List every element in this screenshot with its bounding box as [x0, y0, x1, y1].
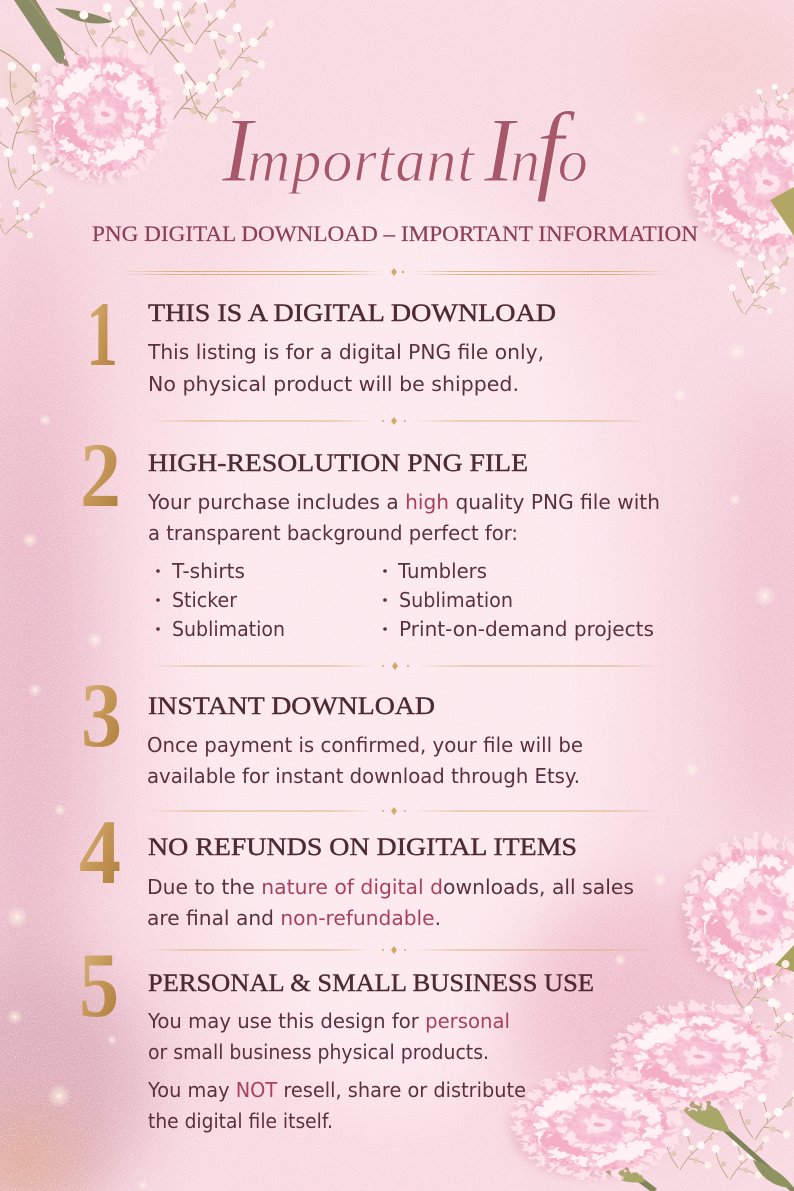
body 5: You may use this design for personal: [147, 1009, 510, 1033]
divider 1: [150, 417, 647, 425]
flowers: bottom right bunch: [499, 960, 794, 1191]
heading 5: PERSONAL & SMALL BUSINESS USE: [148, 968, 594, 997]
title: mportant: [247, 128, 491, 194]
heading 1: THIS IS A DIGITAL DOWNLOAD: [148, 298, 556, 327]
section 5: [79, 934, 594, 1133]
body 1: [147, 340, 544, 396]
body 5: the digital file itself.: [148, 1109, 333, 1133]
flowers: top left bouquet: [0, 0, 275, 241]
section 4: [79, 801, 634, 930]
bullets left: [156, 559, 285, 641]
number 5: 5: [79, 934, 119, 1036]
body 5: [147, 1009, 526, 1133]
number 1: 1: [86, 283, 118, 385]
divider 3: [150, 807, 662, 815]
heading 3: INSTANT DOWNLOAD: [148, 691, 435, 720]
divider: header: [120, 268, 667, 276]
body 4: Due to the nature of digital downloads, all sales: [147, 875, 634, 899]
bullets left: Sticker: [172, 588, 238, 612]
body 5: or small business physical products.: [148, 1040, 489, 1064]
body 3: available for instant download through Etsy.: [147, 764, 580, 788]
divider 4: [145, 946, 652, 954]
heading 2: HIGH-RESOLUTION PNG FILE: [148, 448, 528, 477]
bullets left: Sublimation: [172, 617, 285, 641]
body 4: [147, 875, 634, 930]
body 3: [147, 733, 583, 788]
flowers: top right carnation: [687, 82, 794, 315]
divider 2: [150, 662, 661, 670]
title: I: [483, 99, 519, 201]
body 4: are final and non-refundable.: [147, 906, 441, 930]
body 5: You may NOT resell, share or distribute: [147, 1078, 526, 1102]
number 2: 2: [80, 424, 121, 526]
bullets right: Sublimation: [399, 588, 513, 612]
number 4: 4: [79, 801, 121, 903]
heading 4: NO REFUNDS ON DIGITAL ITEMS: [148, 832, 577, 861]
section 1: [86, 283, 556, 396]
bullets left: T-shirts: [171, 559, 245, 583]
section 2: [80, 424, 660, 641]
body 2: Your purchase includes a high quality PNG file with: [147, 490, 660, 514]
subtitle: PNG DIGITAL DOWNLOAD – IMPORTANT INFORMATION: [92, 221, 698, 246]
title: I: [221, 99, 257, 201]
bullets right: [383, 559, 654, 641]
section 3: [81, 664, 583, 788]
body 3: Once payment is confirmed, your file will be: [147, 733, 583, 757]
title: n: [510, 128, 540, 194]
body 1: This listing is for a digital PNG file only,: [147, 340, 544, 364]
body 1: No physical product will be shipped.: [148, 372, 519, 396]
bullets right: Print-on-demand projects: [399, 617, 654, 641]
flowers: right middle carnation: [681, 838, 794, 986]
title: fo: [536, 92, 588, 203]
body 2: a transparent background perfect for:: [148, 521, 518, 545]
number 3: 3: [81, 664, 122, 766]
bullets right: Tumblers: [397, 559, 487, 583]
body 2: [147, 490, 660, 545]
